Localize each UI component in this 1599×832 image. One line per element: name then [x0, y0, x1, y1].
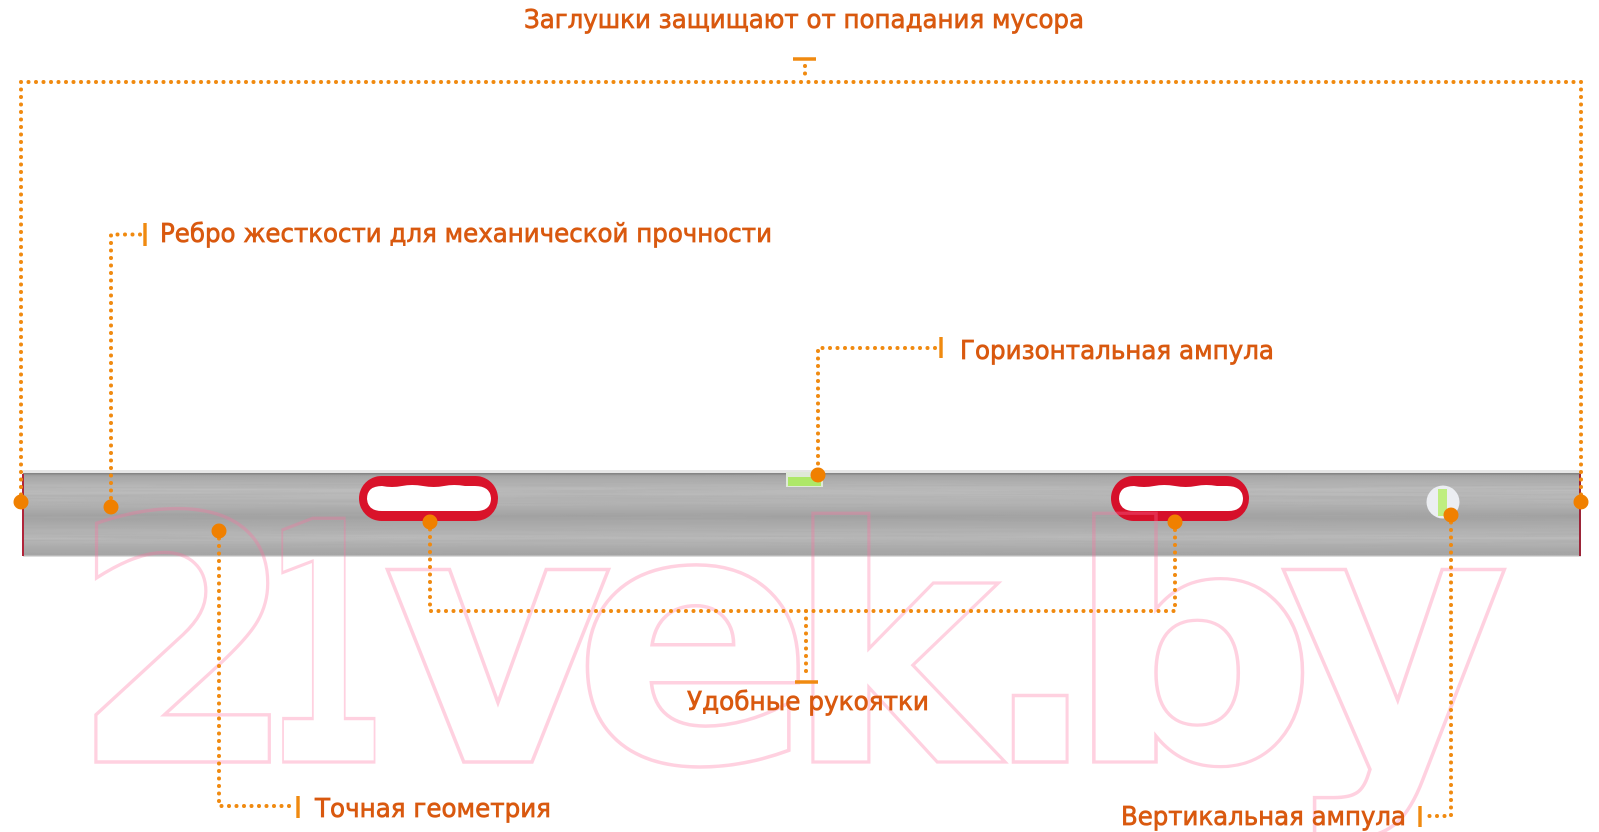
callout: precise geometry	[212, 524, 551, 824]
label: vertical vial: Вертикальная ампула	[1121, 802, 1406, 832]
watermark 21vek.by: 2	[70, 446, 298, 832]
watermark 21vek.by: k	[786, 459, 1006, 832]
callout: handles	[422, 514, 1182, 717]
label: handles: Удобные рукоятки	[687, 687, 929, 717]
red end cap left	[22, 474, 24, 556]
callout: horizontal vial	[810, 336, 1274, 482]
handle right	[1111, 476, 1249, 521]
callout: end caps	[14, 5, 1588, 510]
metal level bar	[22, 470, 1581, 556]
watermark 21vek.by: 1	[262, 453, 387, 832]
handle left	[359, 476, 498, 521]
horizontal vial	[786, 472, 823, 487]
label: precise geometry: Точная геометрия	[314, 794, 551, 824]
label: stiffening rib: Ребро жесткости для механической прочности	[160, 219, 772, 249]
callout: stiffening rib	[104, 219, 772, 514]
watermark 21vek.by	[70, 435, 1511, 832]
watermark 21vek.by: b	[1064, 458, 1318, 832]
vertical vial	[1426, 486, 1460, 518]
callout: vertical vial	[1121, 508, 1458, 832]
red end cap right	[1579, 474, 1581, 556]
label: end caps: Заглушки защищают от попадания мусора	[524, 5, 1084, 35]
label: horizontal vial: Горизонтальная ампула	[960, 336, 1274, 366]
